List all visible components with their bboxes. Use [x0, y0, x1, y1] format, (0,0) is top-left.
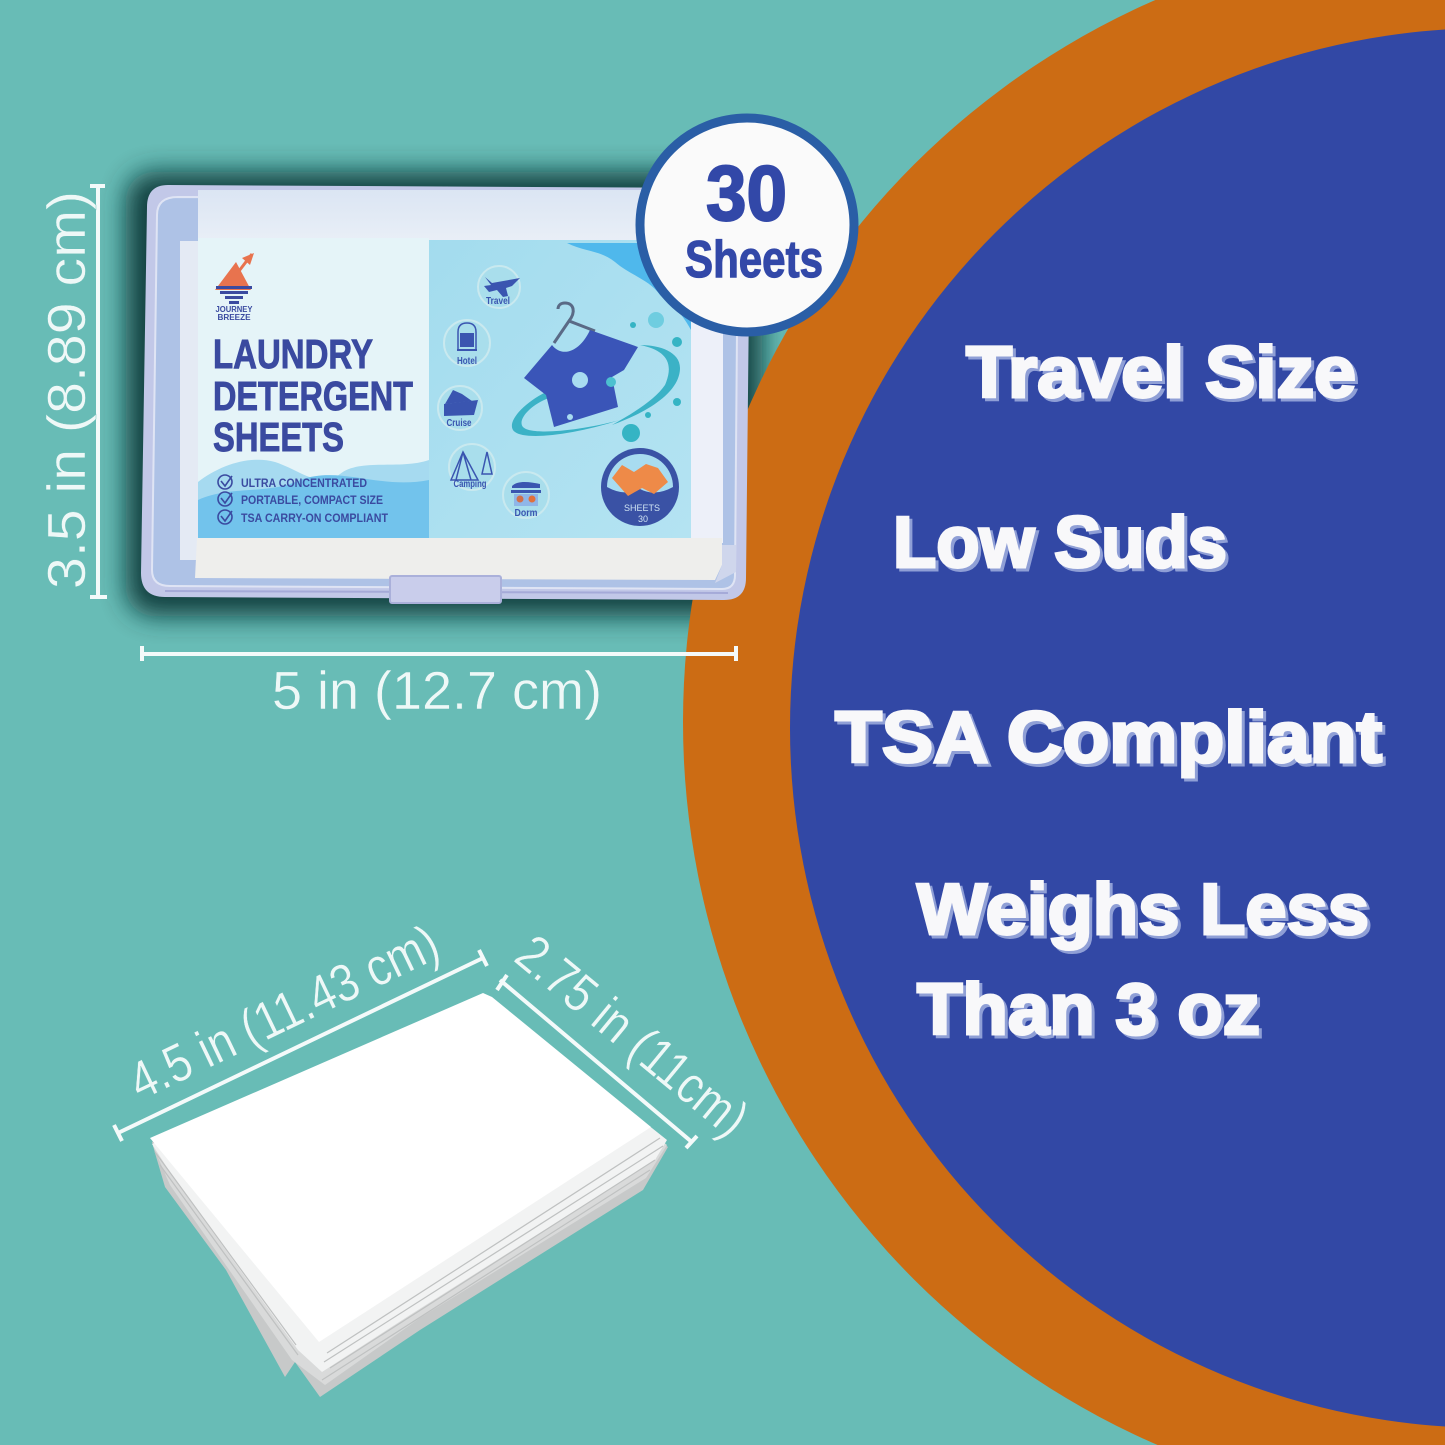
heading: TSA Compliant: TSA Compliant — [838, 701, 1385, 781]
case bottom lip — [165, 590, 728, 594]
logo: journey breeze — [215, 253, 254, 322]
logo: journey breeze: BREEZE — [218, 313, 251, 322]
label checklist — [218, 475, 389, 525]
label title: LAUNDRY — [213, 331, 373, 377]
product box — [141, 185, 750, 603]
heading: Low Suds: Low Suds — [893, 503, 1227, 583]
heading: Weighs Less Than 3 oz: Weighs Less — [917, 870, 1369, 950]
dimension: sheet width: 2.75 in (11cm) — [504, 924, 759, 1149]
icon: dorm: Dorm — [514, 508, 538, 519]
blue circle panel — [790, 28, 1445, 1428]
icon: hotel — [444, 320, 490, 367]
icon: camping: Camping — [454, 479, 486, 490]
label checklist: TSA CARRY-ON COMPLIANT — [241, 511, 389, 525]
icon: cruise: Cruise — [446, 418, 472, 429]
dimension: box width — [142, 646, 736, 721]
label checklist: ULTRA CONCENTRATED — [241, 476, 367, 490]
icon: cruise — [438, 386, 482, 430]
stack layer edges — [155, 1138, 663, 1380]
heading: Low Suds: Low Suds — [896, 506, 1230, 586]
heading: Travel Size: Travel Size — [969, 336, 1359, 416]
heading: Weighs Less Than 3 oz — [917, 870, 1372, 1053]
sheets inside case — [198, 190, 668, 242]
illustration: shirt on hanger — [512, 303, 680, 436]
icon: hotel: Hotel — [457, 356, 477, 367]
badge: 30 sheets — [640, 118, 854, 332]
heading: Travel Size: Travel Size — [966, 333, 1356, 413]
label checklist: PORTABLE, COMPACT SIZE — [241, 493, 383, 507]
heading: Weighs Less Than 3 oz: Than 3 oz — [917, 970, 1260, 1050]
bubbles — [622, 312, 682, 442]
dimension: box width: 5 in (12.7 cm) — [272, 661, 602, 721]
heading: Weighs Less Than 3 oz: Weighs Less — [920, 873, 1372, 953]
label: waves — [198, 460, 429, 538]
product box shadow — [126, 172, 762, 616]
label title: SHEETS — [213, 414, 344, 460]
badge: 30 sheets: Sheets — [685, 231, 823, 289]
heading: TSA Compliant: TSA Compliant — [835, 698, 1382, 778]
seal: sheets 30: 30 — [638, 514, 648, 524]
clasp — [390, 576, 501, 603]
icon: camping — [449, 444, 495, 490]
icon: travel — [478, 266, 520, 308]
seal: sheets 30: SHEETS — [624, 503, 660, 513]
dimension: box height: 3.5 in (8.89 cm) — [37, 191, 97, 589]
logo: journey breeze: JOURNEY — [216, 305, 253, 314]
label: top right splash — [567, 243, 691, 330]
badge: 30 sheets: 30 — [706, 149, 787, 237]
stack sides — [152, 994, 668, 1397]
dimension: sheet length: 4.5 in (11.43 cm) — [120, 913, 448, 1112]
label title — [213, 331, 413, 460]
label title: DETERGENT — [213, 373, 413, 419]
icon: dorm — [503, 472, 549, 519]
plastic case — [141, 185, 750, 600]
heading: Weighs Less Than 3 oz: Than 3 oz — [920, 973, 1263, 1053]
icon: travel: Travel — [486, 296, 510, 307]
label: right panel — [429, 240, 691, 538]
stack top sheet — [150, 993, 651, 1342]
sheet stack — [150, 993, 668, 1397]
orange circle — [683, 0, 1445, 1445]
label: left panel — [198, 238, 429, 538]
seal: sheets 30 — [601, 448, 679, 526]
